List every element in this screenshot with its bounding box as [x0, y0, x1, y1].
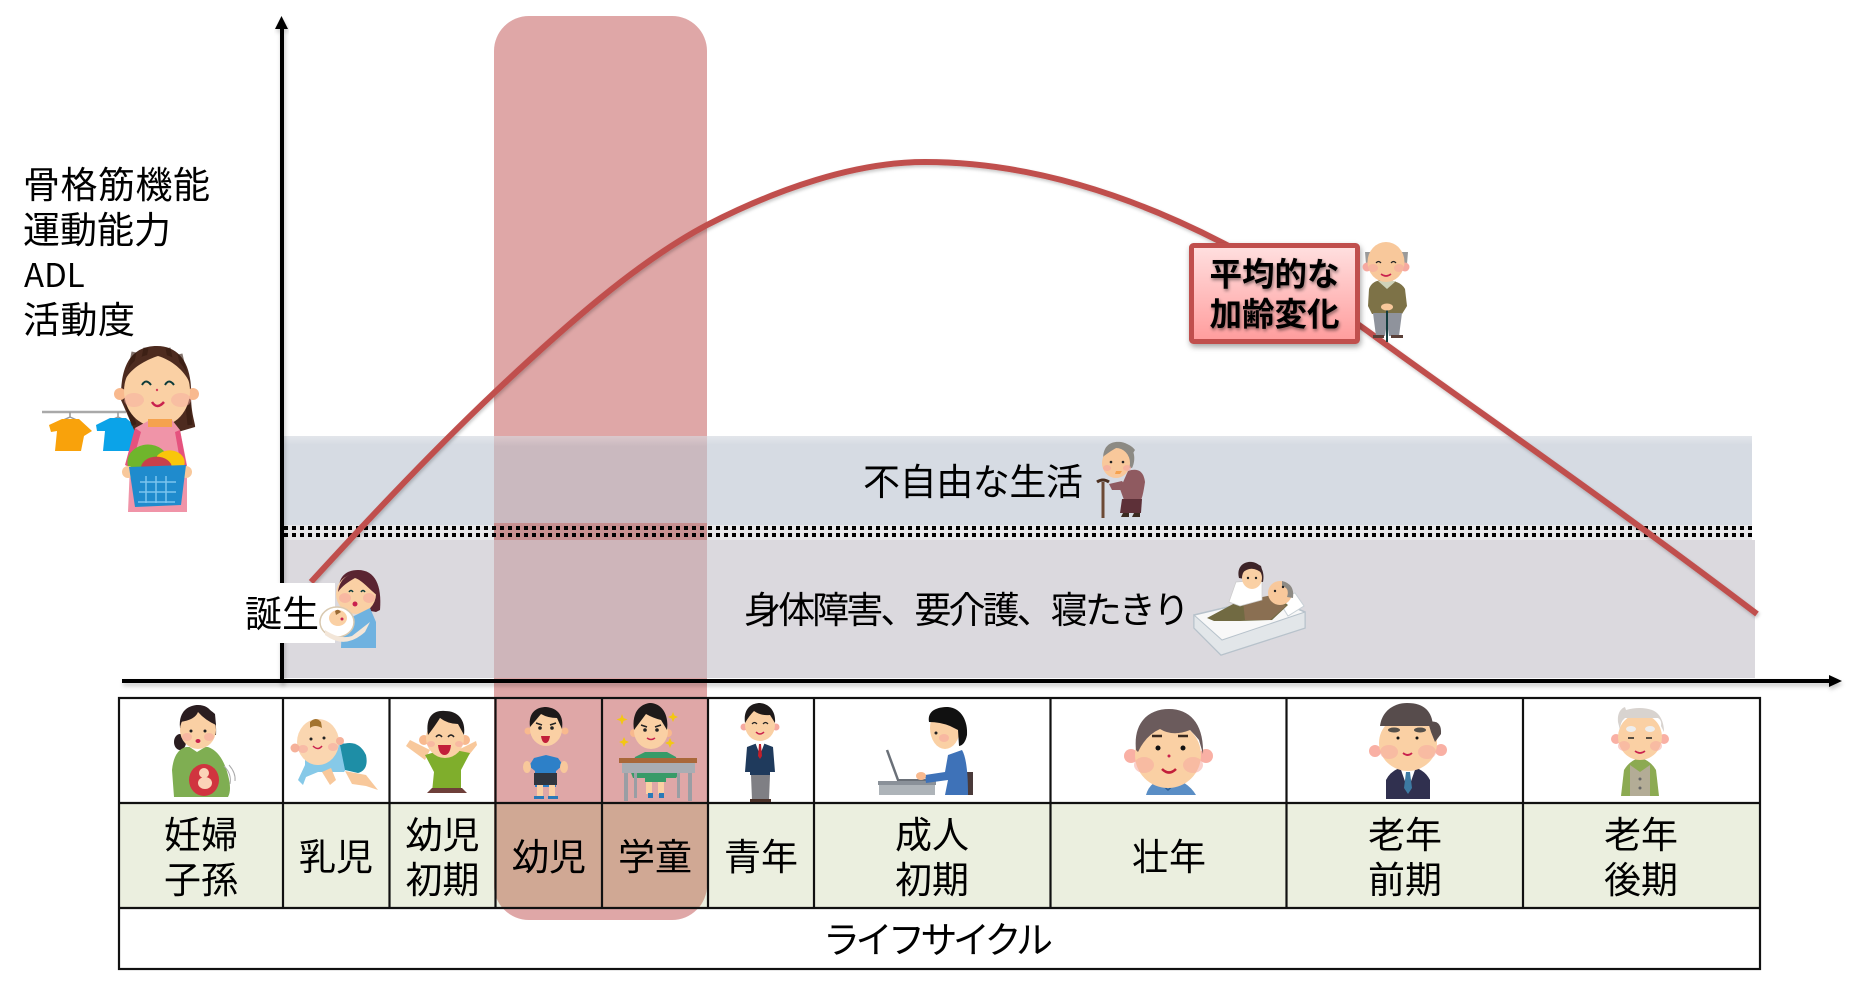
icon: mother holding newborn	[320, 570, 380, 648]
stage label: 幼児: 幼児	[512, 827, 586, 881]
panel: lower band 身体障害 background	[283, 525, 1755, 678]
icon: elderly woman with cane	[1097, 442, 1145, 518]
icon: boy in blue shirt	[523, 707, 568, 799]
stage label: 成人初期: 初期	[895, 850, 969, 904]
y axis label: 骨格筋機能	[23, 155, 210, 209]
y axis label: ADL	[24, 249, 85, 297]
axis caption: ライフサイクル: ライフサイクル	[823, 910, 1053, 964]
icon: woman carrying laundry	[42, 346, 199, 512]
label: 身体障害、要介護、寝たきり: 身体障害、要介護、寝たきり	[744, 580, 1190, 634]
table cell fills: life stage row	[119, 803, 1760, 908]
stage label: 幼児初期	[406, 805, 480, 904]
stage label: 成人初期: 成人	[895, 805, 969, 859]
x axis arrow	[122, 675, 1842, 687]
stage label: 老年前期: 前期	[1368, 850, 1442, 904]
callout: 平均的な加齢変化: 平均的な	[1209, 248, 1340, 296]
stage label: 老年前期	[1368, 805, 1442, 904]
stage label: 妊婦子孫: 妊婦	[164, 805, 238, 859]
stage label: 青年: 青年	[724, 827, 798, 881]
stage label: 壮年: 壮年	[1132, 827, 1206, 881]
y axis arrow	[275, 16, 288, 683]
stage label: 妊婦子孫	[164, 805, 238, 904]
curve: average age-related change	[311, 162, 1757, 614]
stage label: 幼児初期: 初期	[406, 850, 480, 904]
stage label: 成人初期	[895, 805, 969, 904]
callout: 平均的な加齢変化: 加齢変化	[1209, 288, 1340, 336]
table grid	[119, 698, 1760, 969]
y axis label: 運動能力	[23, 200, 171, 254]
icon: caregiver with bedridden patient	[1194, 562, 1305, 655]
y axis label: 活動度	[23, 290, 135, 344]
panel: life cycle table	[119, 698, 1760, 969]
stage label: 幼児初期: 幼児	[406, 805, 480, 859]
icon: crawling baby	[290, 719, 378, 790]
y axis label	[23, 155, 210, 344]
label: 誕生: 誕生	[245, 584, 319, 638]
white label box: 誕生	[240, 583, 335, 643]
stage label: 老年前期: 老年	[1368, 805, 1442, 859]
highlight column: 幼児 and 学童	[494, 16, 707, 920]
panel: upper band 不自由な生活 background	[283, 436, 1752, 525]
stage label: 乳児: 乳児	[299, 827, 373, 881]
icon: young man in suit	[740, 703, 780, 802]
stage label: 老年後期: 老年	[1604, 805, 1678, 859]
callout: 平均的な加齢変化	[1192, 246, 1358, 342]
stage label: 老年後期: 後期	[1604, 850, 1678, 904]
icon: middle-aged man	[1124, 709, 1213, 795]
label: 不自由な生活: 不自由な生活	[863, 452, 1083, 506]
dotted threshold line	[284, 528, 1752, 535]
icon: student at desk	[616, 703, 697, 801]
icon: pregnant woman	[172, 705, 235, 797]
stage label: 学童: 学童	[618, 827, 692, 881]
icon: older man in dark suit	[1369, 703, 1447, 799]
icon: elderly man with cane	[1362, 242, 1410, 342]
icon: toddler with arms raised	[406, 711, 477, 793]
icon: adult at laptop	[878, 707, 973, 795]
stage label: 老年後期	[1604, 805, 1678, 904]
stage label: 妊婦子孫: 子孫	[164, 850, 238, 904]
icon: elderly man in vest	[1611, 707, 1669, 796]
